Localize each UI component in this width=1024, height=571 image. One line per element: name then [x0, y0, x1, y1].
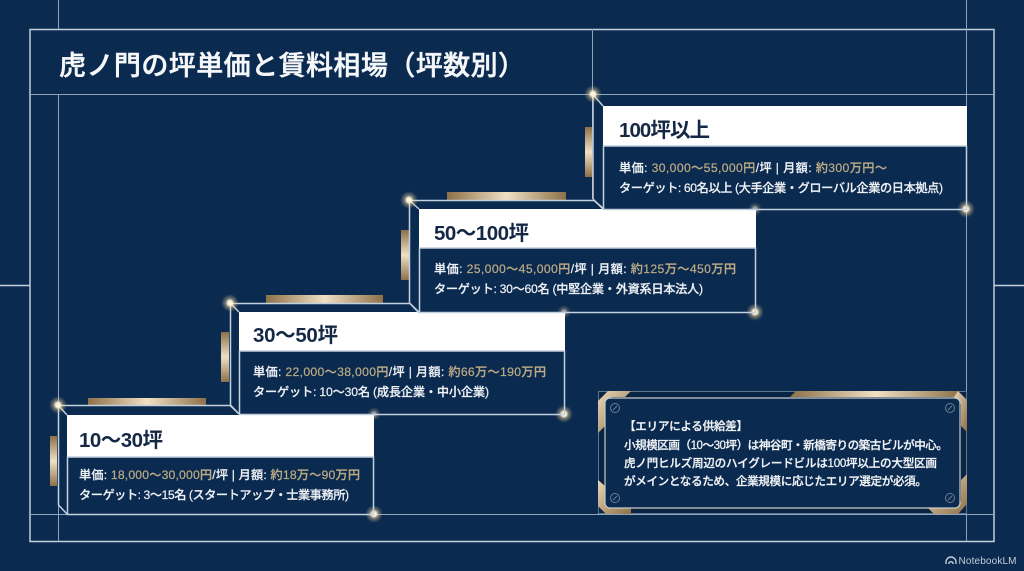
step: 30〜50坪 — [221, 294, 573, 423]
glow points — [221, 294, 573, 423]
card: 10〜30坪 — [79, 429, 163, 452]
callout text: がメインとなるため、企業規模に応じたエリア選定が必須。 — [624, 474, 927, 488]
icon: logo arcs — [946, 557, 956, 564]
card: 30〜50坪 — [253, 324, 338, 347]
callout text — [624, 419, 948, 488]
corner screws — [610, 404, 954, 502]
gold accents — [401, 192, 566, 280]
glow points — [584, 85, 975, 218]
callout text: 小規模区画（10〜30坪）は神谷町・新橋寄りの築古ビルが中心。 — [624, 438, 948, 452]
step outline — [593, 94, 603, 209]
NotebookLM logo: NotebookLM — [958, 556, 1016, 567]
card: 単価: 22,000〜38,000円/坪 | 月額: 約66万〜190万円 — [253, 364, 546, 379]
step outline — [410, 200, 604, 313]
card: ターゲット: 10〜30名 (成長企業・中小企業) — [253, 384, 489, 399]
glow points — [49, 396, 383, 523]
gold accents — [50, 398, 206, 486]
glow points — [400, 191, 764, 321]
step: 10〜30坪 — [49, 396, 383, 523]
card — [419, 209, 756, 312]
card — [239, 312, 565, 414]
card — [67, 415, 374, 514]
card: 100坪以上 — [619, 119, 710, 142]
card: 50〜100坪 — [434, 222, 529, 245]
step outline — [230, 304, 419, 414]
step: 100坪以上 — [584, 85, 975, 218]
callout: area supply difference — [598, 391, 967, 514]
title: 虎ノ門の坪単価と賃料相場（坪数別） — [59, 51, 525, 81]
gold accents — [585, 127, 592, 177]
card: ターゲット: 30〜60名 (中堅企業・外資系日本法人) — [434, 281, 703, 296]
card — [603, 106, 967, 210]
callout text: 虎ノ門ヒルズ周辺のハイグレードビルは100坪以上の大型区画 — [624, 456, 937, 470]
gold accents — [221, 295, 383, 382]
card: 単価: 25,000〜45,000円/坪 | 月額: 約125万〜450万円 — [434, 261, 736, 276]
card: ターゲット: 3〜15名 (スタートアップ・士業事務所) — [79, 487, 349, 502]
card: 単価: 30,000〜55,000円/坪 | 月額: 約300万円〜 — [619, 160, 887, 175]
callout frame — [598, 391, 967, 514]
card: ターゲット: 60名以上 (大手企業・グローバル企業の日本拠点) — [619, 180, 943, 195]
step: 50〜100坪 — [400, 191, 764, 321]
step outline — [58, 406, 239, 514]
callout text: 【エリアによる供給差】 — [624, 419, 748, 433]
card: 単価: 18,000〜30,000円/坪 | 月額: 約18万〜90万円 — [79, 467, 360, 482]
